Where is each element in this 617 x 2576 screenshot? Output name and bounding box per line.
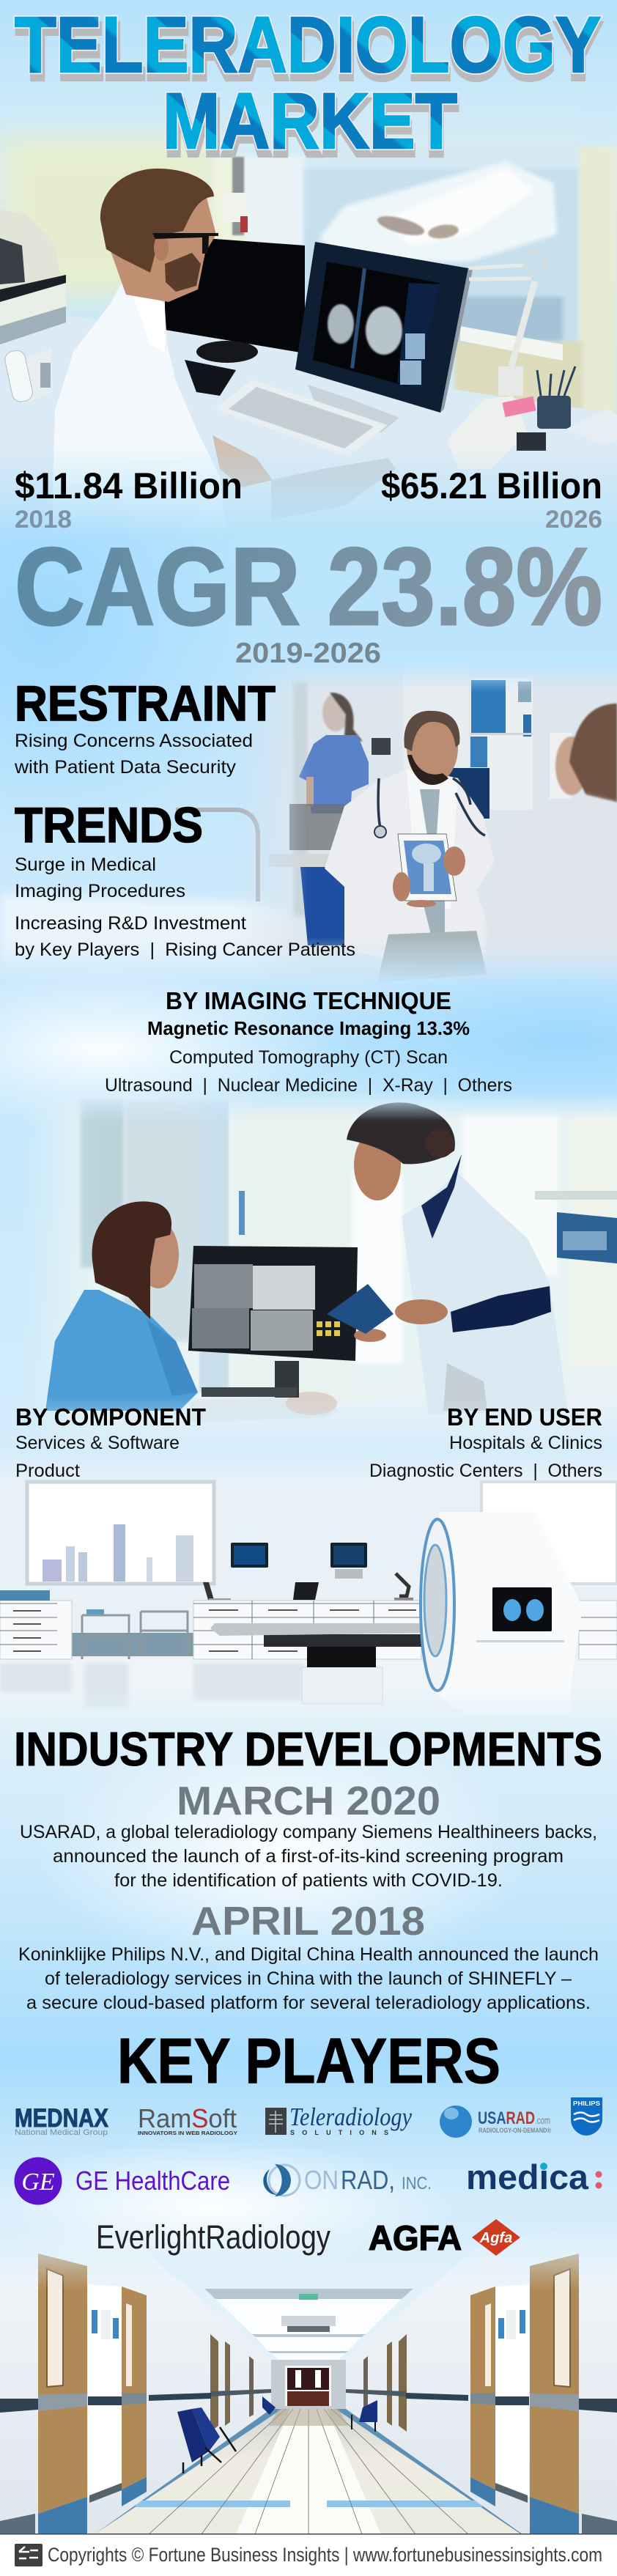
title line: MARKET: MARKET [163, 76, 457, 165]
logo: Teleradiology Solutions [265, 2103, 412, 2136]
logo: Teleradiology Solutions: Teleradiology [289, 2103, 412, 2131]
trends text: Increasing R&D Investment [15, 913, 246, 934]
MRI machine [421, 1512, 583, 1715]
component segments: Services & Software [15, 1433, 180, 1453]
right monitor [557, 1212, 617, 1263]
cabinets [0, 1601, 617, 1659]
description: Koninklijke Philips N.V., and Digital China Health announced the launch [18, 1944, 599, 1965]
by end user [369, 1403, 602, 1481]
end user segments: Diagnostic Centers | Others [369, 1461, 602, 1481]
component segments [15, 1433, 180, 1481]
logo: Everlight Radiology: EverlightRadiology [96, 2218, 330, 2256]
logo: GE HealthCare [15, 2158, 230, 2204]
market value 2026: 2026 [545, 506, 602, 534]
printer [0, 210, 66, 330]
title line: MARKET: MARKET [165, 83, 457, 171]
logo: Agfa: Agfa [479, 2230, 512, 2246]
restraint text [14, 731, 253, 778]
man [53, 169, 223, 504]
footer [0, 2533, 617, 2576]
description [18, 1944, 599, 2013]
key players heading: KEY PLAYERS [117, 2026, 500, 2097]
logo: Onrad [263, 2164, 432, 2196]
photo: hospital corridor [0, 2221, 617, 2534]
end user segments: Hospitals & Clinics [449, 1433, 602, 1453]
chairs [177, 2396, 377, 2473]
restraint text: with Patient Data Security [14, 757, 237, 778]
restraint text: Rising Concerns Associated [15, 731, 253, 751]
mirrored right wall [346, 2221, 617, 2534]
trolleys [82, 1612, 188, 1659]
keyboard [215, 380, 388, 457]
description: announced the launch of a first-of-its-kind screening program [53, 1846, 564, 1867]
end user segments [369, 1433, 602, 1481]
desk [0, 315, 617, 542]
dark monitor [165, 235, 305, 353]
standing clinician [347, 1102, 568, 1414]
description: USARAD, a global teleradiology company Siemens Healthineers backs, [20, 1822, 597, 1842]
component heading: BY COMPONENT [15, 1403, 206, 1431]
logo: RamSoft: INNOVATORS IN WEB RADIOLOGY [138, 2130, 237, 2136]
trends text [15, 855, 355, 960]
description: for the identification of patients with COVID-19. [114, 1870, 503, 1891]
ceiling panels [204, 2289, 413, 2360]
tray cart [269, 804, 347, 867]
desk surface [110, 1389, 617, 1458]
imaging heading: BY IMAGING TECHNIQUE [166, 987, 451, 1014]
description: a secure cloud-based platform for several teleradiology applications. [26, 1993, 591, 2013]
logo: Onrad: ON [304, 2165, 339, 2195]
brain scan left [328, 304, 354, 344]
floor reflections [0, 1664, 303, 1708]
description: of teleradiology services in China with the launch of SHINEFLY – [45, 1968, 572, 1989]
restraint section [14, 676, 276, 778]
by component [15, 1403, 206, 1481]
restraint heading: RESTRAINT [15, 676, 276, 731]
laptop and microscope [203, 1573, 413, 1601]
market value 2018: 2018 [15, 506, 72, 534]
small keyboard [185, 360, 236, 396]
bed [0, 808, 289, 974]
hand-held x-ray [327, 1284, 394, 1334]
market value 2026: $65.21 Billion [381, 465, 602, 506]
patient seen from behind [486, 704, 617, 982]
market value 2018 [15, 465, 243, 534]
imaging segment: Computed Tomography (CT) Scan [169, 1047, 448, 1068]
icon: Fortune Business Insights logo [15, 2544, 43, 2566]
scanner table [210, 1623, 445, 1704]
other imaging segments: Ultrasound | Nuclear Medicine | X-Ray | Others [105, 1075, 512, 1096]
nurse [299, 693, 369, 945]
development: March 2020 [20, 1778, 597, 1891]
blue lab devices [0, 1590, 104, 1615]
left wall with doors [0, 2221, 271, 2534]
trends text: by Key Players | Rising Cancer Patients [15, 940, 355, 960]
logo: USARAD [440, 2106, 551, 2138]
component segments: Product [15, 1461, 80, 1481]
date: MARCH 2020 [177, 1778, 440, 1823]
logo: GE HealthCare: GE HealthCare [75, 2166, 230, 2196]
logo: Agfa [369, 2218, 520, 2257]
by imaging technique [105, 987, 512, 1096]
photo: doctor showing tablet scan [0, 660, 617, 986]
logo: USARAD: RADIOLOGY-ON-DEMAND® [479, 2127, 551, 2134]
end user heading: BY END USER [447, 1403, 602, 1431]
logo: Agfa: AGFA [369, 2218, 462, 2257]
market value 2026 [381, 465, 602, 534]
seated nurse [45, 1201, 339, 1422]
logo: RamSoft: RamSoft [138, 2103, 237, 2133]
main monitor [295, 242, 473, 432]
logo: Philips [571, 2097, 602, 2136]
shelves [470, 678, 572, 810]
logo: Medica: medica [466, 2158, 589, 2196]
logo: Teleradiology Solutions: SOLUTIONS [290, 2129, 388, 2136]
logo: Onrad: INC. [402, 2174, 432, 2193]
description [20, 1822, 597, 1891]
photo: radiologist at workstation [0, 125, 617, 542]
forearm [213, 435, 396, 512]
logo: Onrad: RAD, [341, 2165, 395, 2195]
logo: USARAD: .com [535, 2114, 550, 2126]
tablet with scan [398, 834, 457, 901]
desk items [447, 366, 617, 469]
photo: dental imaging review [0, 1085, 617, 1458]
trends text: Surge in Medical [15, 855, 156, 875]
imaging lead segment: Magnetic Resonance Imaging 13.3% [147, 1017, 470, 1039]
brain scan right [366, 306, 402, 355]
title line: MARKET: MARKET [163, 76, 457, 165]
logo: Mednax: MEDNAX [15, 2104, 109, 2133]
CAGR period: 2019-2026 [235, 638, 381, 669]
telephone [4, 348, 53, 405]
dental monitor [188, 1246, 358, 1398]
end wall and doors [271, 2360, 347, 2409]
trends heading: TRENDS [15, 797, 203, 853]
logo: USARAD: USARAD [478, 2108, 535, 2128]
baseboard [72, 1633, 193, 1656]
logo: GE HealthCare: GE [21, 2169, 55, 2196]
photo: MRI room [0, 1447, 617, 1735]
trends section [15, 797, 355, 960]
wall displays [231, 1543, 367, 1579]
logo: Philips: PHILIPS [573, 2100, 600, 2107]
window with skyline [27, 1482, 214, 1584]
wall monitor [445, 768, 489, 819]
market value 2018: $11.84 Billion [15, 465, 243, 506]
lamp [469, 251, 545, 396]
logo: Mednax: National Medical Group [15, 2128, 108, 2137]
title [15, 0, 601, 171]
development: April 2018 [18, 1898, 599, 2013]
floor [40, 2409, 579, 2534]
trends text: Imaging Procedures [15, 881, 185, 901]
date: APRIL 2018 [191, 1898, 425, 1944]
doctor [325, 711, 495, 982]
